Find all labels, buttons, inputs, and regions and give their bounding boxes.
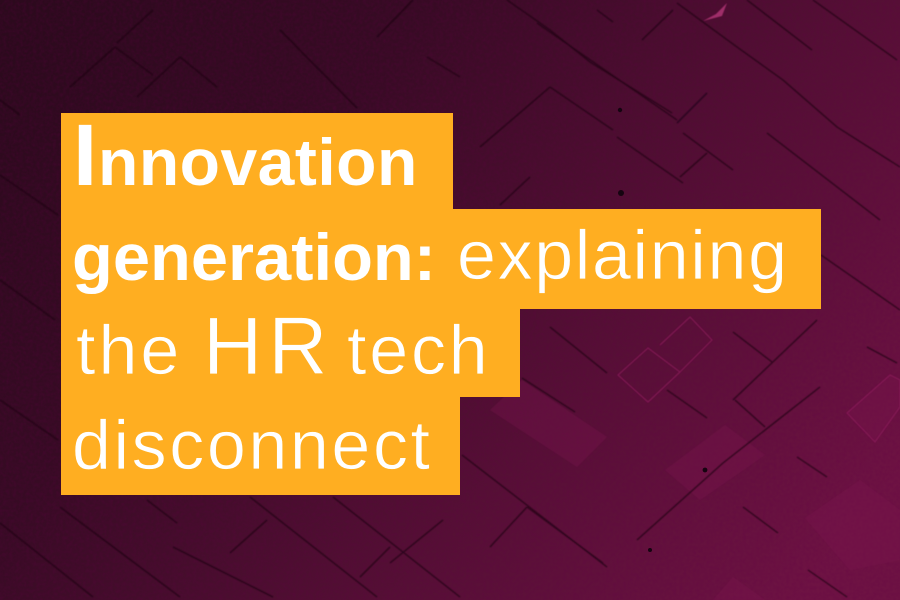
title line 3: HR — [203, 301, 333, 392]
title line 4: disconnect — [72, 406, 430, 484]
title line 3: the — [76, 311, 182, 389]
title line 3: tech — [347, 311, 491, 389]
title line 2 bold: generation: — [72, 220, 436, 294]
orange stepped title block — [61, 113, 821, 495]
title line 2 regular: explaining — [457, 216, 787, 294]
title line 1: I — [73, 107, 97, 204]
title text — [72, 107, 787, 484]
title line 1: nnovation — [98, 125, 418, 199]
